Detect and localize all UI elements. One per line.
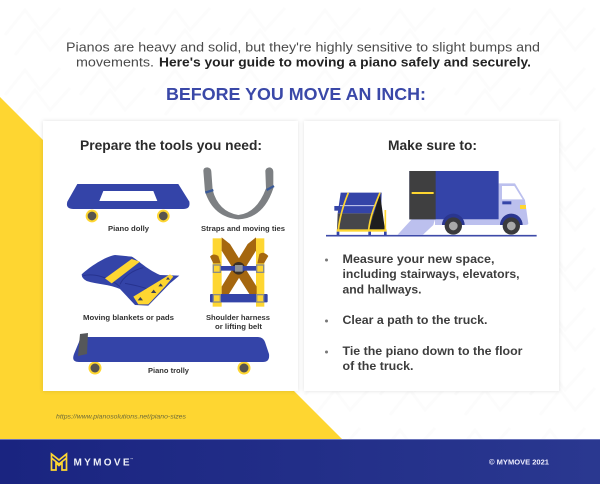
intro text [66, 40, 540, 70]
intro text: movements. [76, 54, 154, 70]
icon: moving truck with piano [326, 171, 537, 236]
bullet: tie piano [325, 346, 523, 373]
label: piano dolly: Piano dolly [108, 226, 149, 233]
bullet: clear path: Clear a path to the truck. [342, 315, 488, 327]
intro text: Here's your guide to moving a piano safely and securely. [159, 54, 531, 70]
panel: make sure [304, 121, 559, 391]
bullet: measure: and hallways. [342, 284, 422, 296]
bullet: measure: Measure your new space, [342, 254, 494, 266]
label: shoulder harness [206, 315, 270, 331]
bullet: tie piano: Tie the piano down to the floor [342, 346, 523, 358]
footer [0, 439, 600, 484]
tools heading: Prepare the tools you need: [80, 138, 262, 153]
icon: piano dolly [67, 184, 190, 222]
icon: shoulder harness [210, 237, 268, 307]
heading: BEFORE YOU MOVE AN INCH: [166, 84, 426, 104]
logo text: MYMOVE [74, 458, 130, 468]
label: shoulder harness: Shoulder harness [206, 315, 270, 322]
intro text: Pianos are heavy and solid, but they're highly sensitive to slight bumps and [66, 40, 540, 54]
bullet: tie piano: of the truck. [342, 361, 414, 373]
copyright: © MYMOVE 2021 [489, 458, 549, 466]
label: moving blankets: Moving blankets or pads [83, 315, 174, 322]
logo icon [52, 454, 66, 470]
panel: tools [43, 121, 298, 391]
make sure heading: Make sure to: [388, 138, 477, 153]
yellow diagonal background [0, 97, 342, 439]
label: shoulder harness: or lifting belt [215, 324, 263, 331]
source link: https://www.pianosolutions.net/piano-sizes [56, 414, 186, 420]
icon: moving blankets [82, 255, 179, 306]
icon: straps [203, 167, 274, 219]
icon: piano trolly [73, 333, 269, 374]
logo text: ™ [130, 457, 133, 461]
bullet: measure: including stairways, elevators, [342, 269, 520, 281]
bullet: measure [325, 254, 520, 296]
label: piano trolly: Piano trolly [148, 368, 189, 375]
label: straps: Straps and moving ties [201, 226, 285, 233]
